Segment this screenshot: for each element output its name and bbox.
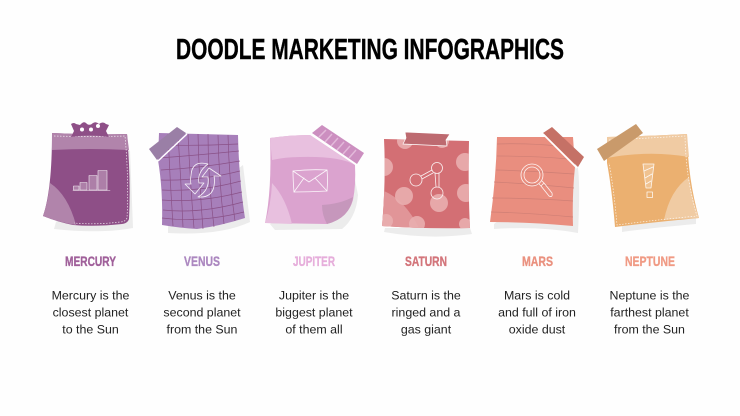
label: NEPTUNE — [625, 253, 675, 269]
note shadow — [270, 170, 358, 230]
note shadow — [54, 150, 133, 231]
description: biggest planet — [275, 306, 353, 320]
description: Venus is the — [168, 288, 236, 302]
label: MERCURY — [65, 253, 116, 269]
note top band — [607, 134, 689, 158]
description: Jupiter is the — [279, 288, 349, 302]
tape stripes — [319, 130, 356, 158]
note shadow — [494, 160, 579, 233]
sticky note — [607, 134, 699, 227]
note top light — [270, 135, 355, 165]
description: from the Sun — [614, 322, 685, 336]
icon: molecule share — [410, 162, 443, 199]
label: MARS — [522, 253, 553, 269]
description: Mars is cold — [504, 288, 570, 302]
stitching — [609, 136, 697, 225]
note dots — [382, 139, 470, 228]
note corner — [265, 183, 292, 224]
label: SATURN — [405, 253, 447, 269]
tape — [312, 125, 364, 164]
description: to the Sun — [62, 322, 119, 336]
note shadow — [168, 165, 250, 234]
sticky note — [158, 133, 245, 229]
description: second planet — [163, 306, 241, 320]
tape — [597, 124, 643, 161]
note lines — [491, 144, 574, 217]
icon: bar chart — [73, 170, 110, 190]
tape — [403, 132, 450, 146]
description: oxide dust — [509, 322, 566, 336]
note shadow — [622, 215, 696, 232]
tape dots — [80, 124, 100, 132]
description: Neptune is the — [610, 288, 690, 302]
tape — [71, 122, 109, 137]
tape gap — [158, 134, 187, 161]
icon: exclamation mark — [643, 164, 654, 198]
description: of them all — [285, 322, 343, 336]
sticky note — [382, 139, 470, 228]
panel: saturn — [382, 132, 472, 336]
panel: mercury — [43, 122, 133, 336]
description: Saturn is the — [391, 288, 461, 302]
panel: mars — [490, 127, 584, 336]
description: ringed and a — [392, 306, 461, 320]
note grid — [159, 134, 244, 229]
note corner — [664, 177, 699, 220]
tape gap — [543, 134, 577, 168]
label: VENUS — [184, 253, 220, 269]
description: farthest planet — [610, 306, 689, 320]
description: gas giant — [401, 322, 452, 336]
note corner — [43, 183, 76, 225]
description: closest planet — [53, 306, 129, 320]
icon: refresh arrows — [185, 163, 221, 197]
tape — [543, 127, 584, 167]
panel: venus — [149, 127, 250, 336]
icon: magnifying glass — [521, 164, 552, 197]
fold — [322, 197, 353, 224]
note shadow — [384, 228, 472, 237]
label: JUPITER — [293, 253, 335, 269]
tape — [149, 127, 186, 160]
description: Mercury is the — [52, 288, 130, 302]
sticky note — [490, 137, 575, 226]
stitching — [54, 136, 128, 224]
description: and full of iron — [498, 306, 576, 320]
panel: neptune — [597, 124, 699, 336]
icon: envelope — [293, 170, 328, 192]
sticky note — [43, 133, 130, 226]
note top band — [52, 133, 129, 150]
title: DOODLE MARKETING INFOGRAPHICS — [176, 34, 564, 66]
description: from the Sun — [167, 322, 238, 336]
panel: jupiter — [265, 125, 364, 336]
sticky note — [265, 135, 355, 224]
